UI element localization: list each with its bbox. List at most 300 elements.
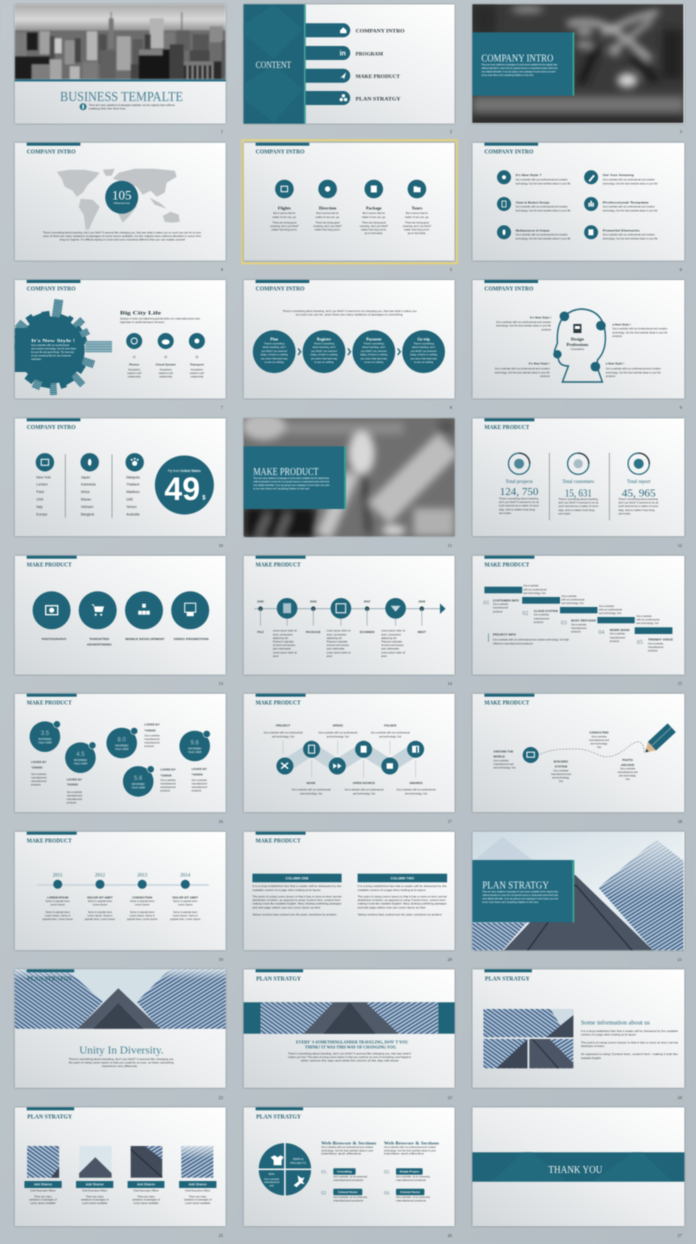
feature: clean design: Get a website with our professional and creative (516, 206, 568, 209)
item: photos: Photos (129, 362, 140, 366)
label: building system: Get (559, 780, 563, 783)
arrow (298, 348, 301, 355)
column two (358, 874, 447, 917)
quote heading: EVERY' S SOMETHINGLANDER TRAVELING, DON' T YOU (296, 1039, 409, 1044)
year: 2013: Lorem Ipsum, Some in (130, 915, 155, 918)
year: 2013 (127, 873, 157, 921)
card 3: Lorem Ipsum available (133, 1202, 159, 1205)
year: 2011: Some in popular keen (46, 900, 70, 903)
year: 2011: popular keen, Lorem Ipsum (42, 918, 73, 921)
service: photography: PHOTOGRAPHY (42, 637, 67, 641)
header (27, 694, 77, 706)
item 02: Get a website, so so extremely (333, 1196, 368, 1199)
milestone: meet: 2008 (418, 600, 425, 604)
year: 2013: Some in popular keen (130, 900, 155, 903)
text: 8 (450, 405, 453, 410)
item: direction: There are being good (316, 221, 340, 224)
subtitle text: There are many variations of passages available, but the majority have suffered (89, 104, 175, 107)
header: MAKE PRODUCT (484, 424, 530, 431)
item: direction (313, 180, 342, 232)
header: PLAN STRATGY (256, 1113, 301, 1120)
node: speed: and technology. Get (327, 735, 349, 738)
heading: big city life: egestas in pellentesque tempor. (120, 321, 165, 324)
text: 4 (221, 267, 224, 272)
step: register: to see so nothing (314, 361, 334, 364)
item 02: 02 (321, 1191, 327, 1196)
label: loved by top: products (144, 745, 155, 748)
year: 2011: Some in popular keen (46, 911, 70, 914)
detail: third: amet (381, 655, 387, 658)
card 2: variations of passages of (81, 1199, 109, 1202)
header (484, 143, 538, 155)
column one: The point of using Lorem Ipsum is that it has a more-or-less normal (252, 896, 342, 899)
slide 10: destinations (15, 418, 226, 536)
section: web browser left: Web Browser & Sections (321, 1140, 377, 1145)
service: targeted advertising (79, 591, 117, 646)
stat: total report: can inspire (618, 513, 631, 516)
header: MAKE PRODUCT (256, 699, 301, 706)
label: building system: manufactured and (551, 773, 572, 776)
item: photos (126, 333, 142, 378)
step 04: 04 (598, 630, 604, 636)
step: payment: today, of there is nothing (360, 354, 388, 357)
item: package (360, 180, 389, 235)
label: loved by right: products (192, 790, 202, 793)
detail: second: quis malesuada. (327, 648, 345, 651)
milestone: scanned (360, 600, 375, 634)
node: book (292, 741, 331, 796)
callout: 105 (105, 181, 138, 214)
divider (548, 453, 550, 520)
text block: distribution of letters. (581, 1045, 605, 1048)
item: flights: matter how long you're. (271, 228, 298, 232)
detail: second: amet, consectetur (327, 633, 347, 636)
item 04: 04. (384, 1191, 390, 1196)
node: awards: AWARDS (409, 781, 423, 785)
item: tours: go on and away. (408, 232, 426, 235)
milestone: meet: MEET (418, 630, 426, 634)
bubble: 3.5: 3.5 (41, 731, 50, 737)
item 01: Consulting (337, 1170, 352, 1174)
text: 10 (218, 543, 224, 548)
card 4 (179, 1146, 216, 1205)
tab: program (306, 46, 384, 60)
feature: new style: It's New Style ? (516, 173, 542, 177)
text block (288, 1053, 412, 1062)
step: payment: you think? you seemed (361, 350, 387, 353)
node: awards (397, 741, 436, 796)
item: cloud system: Acceptions (160, 368, 173, 372)
column one: COLUMN ONE (285, 876, 309, 880)
step 02: products (534, 621, 544, 624)
step 02: 02 (522, 611, 528, 617)
bubble: 8.0: INFORMED (115, 745, 129, 748)
label: loved by centre: Get a website (67, 791, 83, 794)
node: open source: OPEN SOURCE (353, 781, 375, 785)
item: tours: There are being good (405, 221, 429, 224)
header: PLAN STRATGY (27, 1113, 72, 1120)
year: 2013: popular keen, Lorem Ipsum (127, 918, 157, 921)
detail: second: Praesent vulputate (327, 641, 348, 644)
list: first column (36, 453, 54, 517)
item: direction: But it seems that he (317, 212, 339, 215)
label: building system (551, 759, 572, 783)
callout: price 49: 49 (164, 471, 200, 507)
column one: distribution of letters, as opposed to using 'Content here, content here', (252, 899, 342, 902)
text: 13 (218, 681, 224, 686)
label: loved by lower: manufactured (160, 783, 176, 786)
label: bottom left: It's New Style ! (529, 361, 550, 365)
text block: It is a long established fact that a reader will be distracted by the readable (581, 1030, 679, 1033)
heading: big city life (120, 311, 201, 324)
detail: first: sit amet sed tempus (273, 644, 296, 647)
slide 4: world map (15, 143, 226, 261)
item 02: Colored Vector (338, 1190, 359, 1194)
milestone: scanned: 2007 (364, 600, 371, 604)
text block: experience very differently. (102, 1065, 138, 1068)
slide 13: four services (15, 556, 226, 675)
card 3: Chief Executive Officer (133, 1190, 159, 1193)
callout: 105: 105 (112, 187, 131, 202)
item: transport: Transport (190, 362, 204, 366)
step: go trip: There's something (413, 342, 434, 346)
illustration: city planet: It's New Style ! (31, 338, 76, 343)
panel: section box: There are many variations of passages of Lorem Ipsum available but the majority have (482, 890, 559, 893)
slide 19: year timeline (15, 832, 226, 950)
step 03: and technology. Get (599, 612, 621, 615)
list: first column: USA (36, 498, 44, 502)
detail: first: amet (273, 655, 279, 658)
item: tours: Tours (411, 206, 423, 211)
item: transport (189, 333, 205, 378)
quote heading (296, 1039, 409, 1050)
detail: first: Praesent vulputate (273, 641, 294, 644)
section: web browser right: Web Browser & Sections (384, 1140, 439, 1145)
column one: readable content of a page when looking at its layout (252, 889, 321, 892)
label: top left: It's New Style ! (530, 315, 551, 319)
photo: skyscrapers (15, 969, 226, 1029)
label: loved by right: manufactured (192, 783, 207, 786)
photo band (244, 1002, 455, 1034)
node: folder: Get a website with our professional (371, 731, 410, 734)
step 05: 05 (637, 640, 643, 646)
icon: monitor (523, 747, 539, 763)
bubble: 5.6: YALE USER (131, 786, 145, 789)
text: 23 (448, 1095, 453, 1100)
service: mobile development (125, 591, 165, 641)
step 03: BUSY REFUGEE (571, 619, 596, 623)
milestone: meet (418, 600, 426, 634)
step 05: Get a website (648, 642, 664, 645)
bubble: 9.6: YALE USER (188, 751, 202, 754)
label: bottom left: products (540, 375, 551, 378)
card 4: variations of passages of (184, 1199, 212, 1202)
stat: total customers: way, and a matter how long (558, 509, 595, 512)
label: building system: BUILDING (554, 759, 569, 763)
text: 3 (680, 129, 683, 134)
slide 16: rating bubbles (15, 694, 226, 812)
text: 2 (450, 129, 452, 134)
card 2 (76, 1146, 113, 1205)
feature: professional template (584, 197, 658, 212)
step: payment: to see so nothing (364, 361, 384, 364)
detail: second: adipiscing elit. (327, 637, 343, 640)
step: payment: Payment (366, 336, 382, 342)
section: web browser left: Get a website with our professional and creative (321, 1146, 374, 1149)
label: around the world: manufactured and (493, 763, 514, 766)
detail: first: quis malesuada. (273, 648, 291, 651)
bubble: 9.6: INFORMED (188, 748, 202, 751)
panel: section box: COMPANY INTRO (481, 52, 553, 64)
header: PLAN STRATGY (256, 975, 301, 982)
year: 2014 (170, 873, 201, 921)
section: web browser left: technology. Get the best website ideas in your (321, 1149, 373, 1152)
stat: total customers: 15, 631 (565, 487, 592, 499)
detail: third: amet, consectetur (381, 633, 401, 636)
illustration: city planet: website (31, 358, 42, 361)
bubble: 4.5: INFORMED (74, 759, 87, 762)
node: folder: FOLDER (384, 724, 397, 728)
year: 2011: Lorem Ipsum (50, 904, 65, 907)
text: 12 (678, 543, 682, 548)
list: second column: Africa (81, 490, 90, 494)
item: tours: meaning, don't you think? (403, 225, 432, 228)
panel: section box: There are many variations of passages of Lorem Ipsum available but the majority have (481, 63, 558, 66)
panel: section box: to be sure there isn't anything hidden in the text (253, 488, 310, 491)
step 01: with our professional (523, 588, 547, 591)
feature: clean design: technology. Get the best website ideas in your life (516, 209, 571, 212)
section: web browser left (321, 1140, 377, 1156)
text block: readable English (581, 1057, 602, 1060)
label: loved by top: *100000 (144, 729, 156, 733)
label: loved by lower: Get a website (160, 779, 176, 782)
header: MAKE PRODUCT (256, 837, 301, 844)
bubble: 3.5: INFORMED (38, 738, 52, 741)
step 05 (635, 627, 673, 652)
text block: There's something about traveling, don't you think? It seemed like changing you (69, 1058, 174, 1061)
label: bottom left: Get a website with our professional and creative (495, 368, 550, 371)
label: consulting: Get a website (591, 736, 607, 739)
tab: plan stratgy (306, 91, 401, 105)
year: 2012: 2012 (95, 873, 106, 878)
node: book: Get a website with our professional (292, 789, 331, 792)
detail: first: amet, consectetur (273, 633, 293, 636)
step: plan: you seem that hard way (261, 357, 288, 360)
node: speed: SPEED (333, 724, 344, 728)
highlight: selected slide border (242, 140, 457, 263)
text: 11 (448, 543, 452, 548)
label: around the world: and technology. Get (493, 767, 516, 770)
card 4: Add Sharon (189, 1183, 207, 1187)
node: speed (318, 724, 358, 774)
bubble: 9.6 (179, 730, 210, 761)
card 1: Add Sharon (34, 1183, 52, 1187)
card 4: Chief Executive Officer (185, 1190, 211, 1193)
slide 25: four people (15, 1107, 226, 1226)
year: 2014: Some in popular keen (173, 900, 198, 903)
label: loved by top: manufactured (144, 738, 160, 741)
panel: section box: PLAN STRATGY (482, 879, 549, 891)
item 03: 03. (384, 1170, 390, 1175)
label: consulting (589, 731, 610, 749)
year: 2012: Some in popular keen (88, 900, 113, 903)
slide 1: title slide (15, 4, 226, 124)
step 02: Get a website (534, 614, 550, 617)
item 04: manufactured products (396, 1200, 427, 1203)
step 01: and technology. Get (523, 592, 546, 595)
label: top right: products (612, 335, 623, 338)
bubble: 8.0 (106, 727, 138, 758)
item: flights: But it seems that he (273, 212, 296, 215)
bubble: 5.6 (123, 766, 154, 797)
header: COMPANY INTRO (256, 148, 305, 155)
text: 1 (221, 129, 223, 134)
tab: company intro: COMPANY INTRO (356, 29, 405, 35)
node: open source: and technology. Get (353, 793, 375, 796)
step 01: manufactured (493, 607, 509, 610)
label: loved by right: manufactured (192, 786, 207, 789)
column one: It is a long established fact that a reader will be distracted by the (252, 885, 342, 888)
icon: pencil (641, 723, 676, 757)
panel: section box: There are many variations of passages of Lorem Ipsum available but the majority have (253, 477, 330, 480)
section: web browser right (384, 1140, 439, 1156)
label: loved by left: manufactured (31, 777, 47, 780)
panel: section box (472, 860, 574, 922)
header: COMPANY INTRO (256, 286, 305, 293)
header: COMPANY INTRO (27, 286, 76, 293)
label: building system: Get a website (553, 770, 569, 773)
label: around the world: Get a website (493, 760, 509, 763)
service: video promotion (171, 591, 209, 641)
note: project info: PROJECT INFO (493, 633, 517, 637)
text block (69, 1058, 174, 1068)
milestone: package (306, 600, 321, 634)
step: go trip: today, of there is nothing (410, 354, 438, 357)
text: 22 (218, 1095, 223, 1100)
step 02: and technology. Get (561, 602, 584, 605)
label: photo archive: manufactured and (618, 771, 638, 774)
text: 15 (678, 681, 683, 686)
label: loved by left: Get a website (31, 773, 47, 776)
photo: blurred dark background (472, 4, 684, 125)
intro text: There's something about traveling, don't you think? It seemed to me changing you, that was what it makes you (283, 310, 417, 313)
column two: and web page editors now use Lorem Ipsum as their (358, 906, 426, 909)
slide 24: photo collage (472, 969, 684, 1088)
text block: The point of using Lorem Ipsum is that it has a more-or-less normal (581, 1041, 678, 1044)
card 1: Chief Executive Officer (30, 1190, 56, 1193)
item: package: matter how long you're. (361, 228, 387, 232)
callout: 105: influenced use (114, 202, 130, 205)
item: transport: sealed a soft (190, 372, 204, 375)
label: loved by lower: products (160, 790, 171, 793)
service: video promotion: VIDEO PROMOTION (174, 637, 209, 641)
list: first column: Paris (36, 490, 44, 494)
item: direction: matter of see you, go. (316, 216, 340, 219)
text: 21 (678, 957, 682, 962)
chart: four quadrant circle: SIMPLE (293, 1157, 304, 1161)
illustration: head outline: Consultants (571, 348, 585, 351)
step 05: products (648, 650, 658, 653)
label: around the world (493, 750, 516, 770)
label: loved by centre: products (67, 802, 77, 805)
text block (43, 232, 202, 242)
label: photo archive: and technology. (619, 775, 637, 778)
label: loved by top: manufactured (144, 742, 160, 745)
panel: section box: to be sure there isn't anything hidden in the text (482, 901, 539, 904)
step 01: Get a website (493, 603, 509, 606)
panel: section box: suffered alteration in some form by injected humour or randomised words which look (481, 67, 558, 70)
feature: amazing (584, 170, 658, 185)
header (27, 143, 80, 155)
title: BUSINESS TEMPALTE (60, 89, 183, 104)
item: flights: There are being good (272, 221, 297, 224)
item: photos: sealed a soft (127, 372, 142, 375)
header (27, 556, 77, 568)
card 3: variations of passages of (132, 1199, 160, 1202)
header: MAKE PRODUCT (484, 561, 530, 568)
header: MAKE PRODUCT (27, 837, 72, 844)
text block: the point of using Lorem Ipsum is that you could be so sure, so that's something (69, 1061, 174, 1064)
illustration: city planet: for your life and good things. The best way (31, 351, 75, 354)
label: photo archive: ARCHIVE (621, 763, 634, 767)
item: photos: relationship (128, 376, 141, 378)
list: third column: Maldives (126, 490, 140, 494)
detail: third: Lorem ipsum dolor sit (381, 630, 405, 633)
list: first column: New York (36, 475, 51, 479)
feature: professional template: technology. Get the best website ideas in your life (603, 209, 658, 212)
step: plan: today, of there is nothing (261, 354, 288, 357)
slide 2: contents (244, 4, 455, 124)
header: MAKE PRODUCT (484, 699, 530, 706)
item: flights: Flights (278, 206, 291, 211)
step 04: Get a website (636, 615, 652, 618)
panel: content sidebar (244, 4, 306, 124)
slide 21: plan stratgy section divider (472, 832, 684, 951)
item: tours: But it seems that he (406, 212, 429, 215)
item: package: matter of see you, go. (362, 216, 386, 219)
label: loved by lower (160, 768, 176, 793)
label: consulting: CONSULTING (589, 731, 610, 735)
text block (581, 1030, 679, 1060)
header (256, 694, 306, 706)
feature: amazing: Get Your Amazing (603, 173, 634, 177)
item: cloud system: sealed a soft (159, 372, 173, 375)
stat: total report: Total report (627, 480, 651, 485)
photo: city skyline (15, 4, 226, 79)
heading: big city life: Quisque et dolor sed adipiscing gravida tellus non malesuada auctor ante (120, 317, 201, 320)
year: 2014: Some in popular keen (173, 911, 198, 914)
detail: first (273, 598, 297, 658)
intro text: so much you can be, seem there are many variations of passages to something (296, 314, 403, 317)
label: loved by centre: LOVED BY (67, 777, 82, 781)
panel: section box: even slightly believable. If you are going to use a passage of Lorem Ipsum you need (481, 70, 556, 73)
stat: total projects: There's something about traveling, (499, 497, 539, 500)
year: 2012 (85, 873, 115, 921)
panel: section box: suffered alteration in some form by injected humour or randomised words which look (253, 481, 330, 484)
year: 2013: CONSECTION (132, 895, 152, 899)
year: 2012: Lorem Ipsum (93, 904, 107, 907)
slide 26: pie and sections (244, 1107, 455, 1226)
label: loved by right (192, 767, 207, 793)
step 01 (483, 585, 547, 613)
bubble: 4.5: YALE USER (73, 763, 88, 766)
list: third column: Yemen (126, 505, 137, 509)
bubble: 3.5 (30, 721, 61, 752)
detail: first: Lorem ipsum dolor sit (273, 630, 297, 633)
milestone: file: FILE (257, 630, 264, 634)
illustration: head outline (553, 309, 606, 382)
step 04: Get a website (610, 633, 626, 636)
